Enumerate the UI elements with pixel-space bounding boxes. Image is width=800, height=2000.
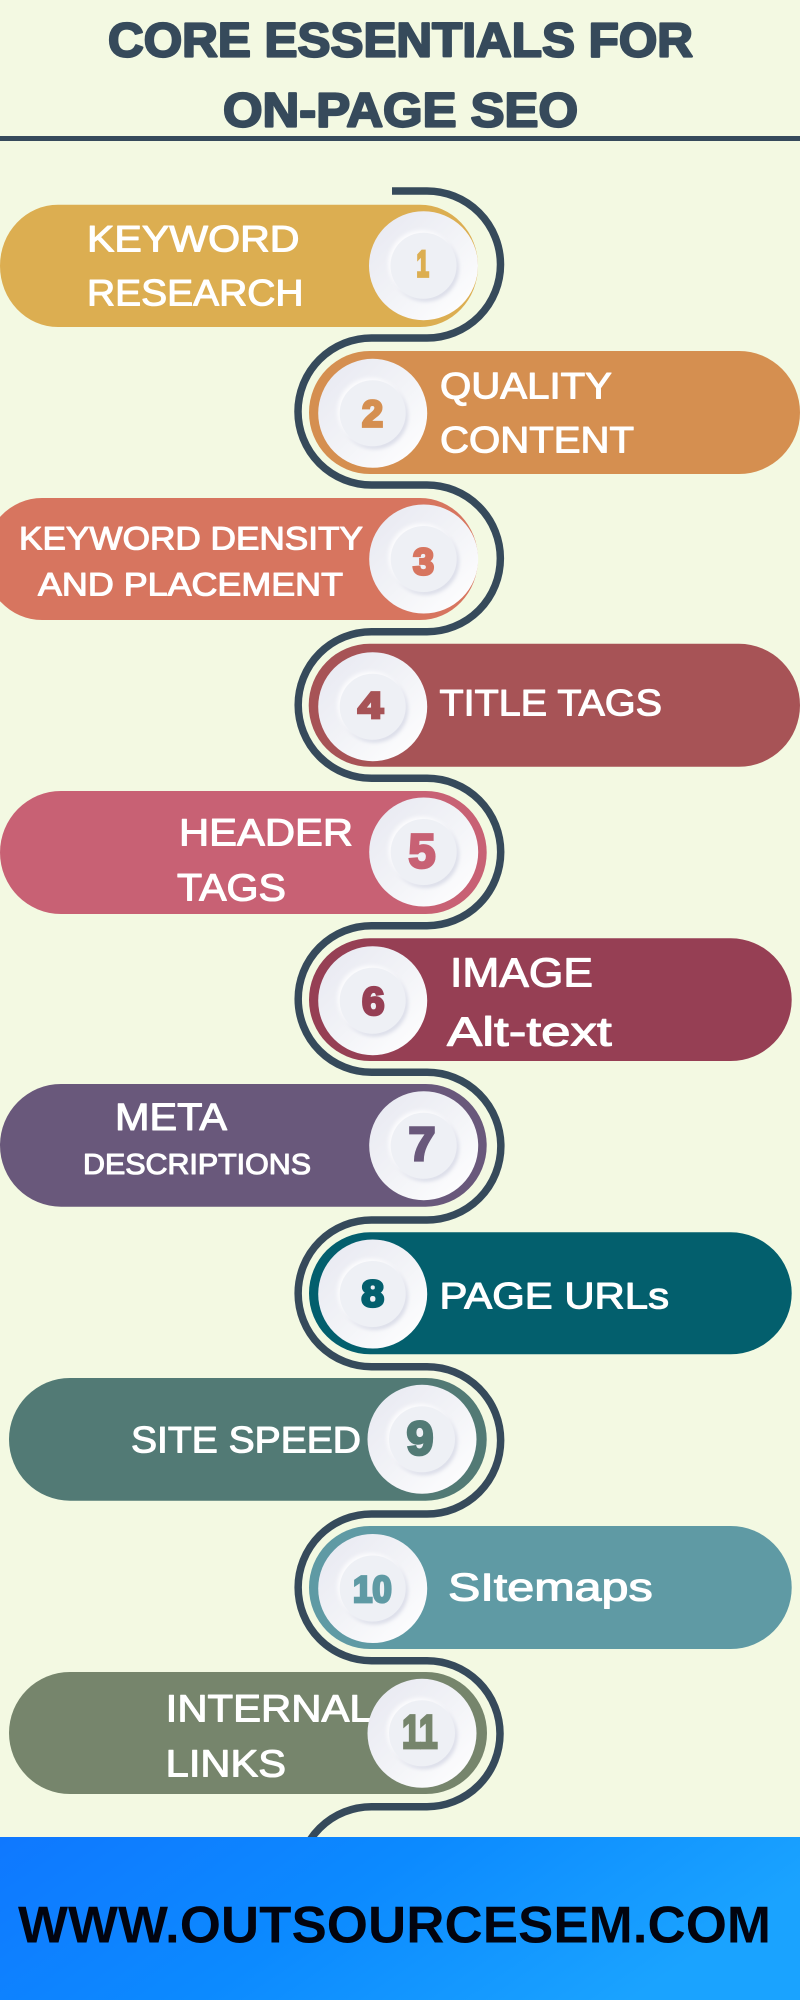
winding connector line [298,191,501,1880]
label 1 [87,218,304,314]
number 1: 1 [416,244,429,285]
label 1: KEYWORD [87,218,300,260]
number 3: 3 [413,542,434,583]
title [108,14,693,138]
label 10: SItemaps [448,1567,653,1610]
badge 7 [369,1091,478,1200]
label 5: TAGS [177,868,286,910]
pill 9 [9,1378,487,1501]
pill 11 [9,1672,487,1794]
label 2: QUALITY [440,366,612,407]
label 11: LINKS [166,1744,286,1786]
item 4: title tags [309,644,800,767]
label 3: AND PLACEMENT [38,566,343,602]
badge 1 [369,211,478,320]
item 6: image alt-text [309,938,792,1061]
pill 1 [0,205,478,327]
number 9: 9 [406,1412,434,1465]
pill 7 [0,1084,487,1207]
pill 6 [309,938,792,1061]
label 1: RESEARCH [87,272,304,314]
item 8: page urls [309,1232,792,1354]
label 11 [166,1688,373,1786]
number 4: 4 [358,685,384,726]
pill 3 [0,498,478,620]
label 7: DESCRIPTIONS [83,1149,311,1181]
item 5: header tags [0,791,487,914]
label 7 [83,1097,311,1181]
badge 5 [369,798,478,906]
item 2: quality content [309,351,800,474]
label 6: Alt-text [447,1008,612,1054]
item 7: meta descriptions [0,1084,487,1207]
label 11: INTERNAL [166,1688,373,1730]
label 9: SITE SPEED [131,1420,361,1460]
item 11: internal links [9,1672,487,1794]
pill 8 [309,1232,792,1354]
item 3: keyword density and placement [0,498,478,620]
badge 8 [318,1240,427,1348]
pill 10 [309,1526,792,1649]
item 9: site speed [9,1378,487,1501]
number 10: 10 [353,1569,392,1610]
footer banner [0,1837,800,2000]
label 6 [447,950,612,1054]
number 11: 11 [402,1705,438,1758]
pill 5 [0,791,487,914]
badge 3 [369,504,478,614]
label 4: TITLE TAGS [440,683,662,724]
label 2: CONTENT [440,420,634,460]
title: CORE ESSENTIALS FOR [108,14,693,68]
badge 2 [318,359,427,468]
footer website text: WWW.OUTSOURCESEM.COM [18,1897,771,1955]
label 6: IMAGE [450,950,593,996]
label 5: HEADER [179,812,353,854]
label 5 [177,812,353,910]
item 10: sitemaps [309,1526,792,1649]
number 7: 7 [408,1118,436,1170]
pill 2 [309,351,800,474]
item 1: keyword research [0,205,478,327]
label 8: PAGE URLs [440,1276,669,1316]
label 3: KEYWORD DENSITY [19,520,363,556]
number 8: 8 [362,1274,384,1315]
label 3 [19,520,363,602]
number 6: 6 [362,981,384,1024]
badge 4 [318,652,427,761]
pill 4 [309,644,800,767]
label 2 [440,366,634,460]
number 5: 5 [408,826,436,879]
label 7: META [115,1097,228,1139]
badge 10 [318,1534,427,1643]
title: ON-PAGE SEO [223,84,578,138]
badge 6 [318,946,427,1055]
badge 9 [368,1385,476,1494]
badge 11 [368,1679,476,1788]
number 2: 2 [362,394,383,435]
